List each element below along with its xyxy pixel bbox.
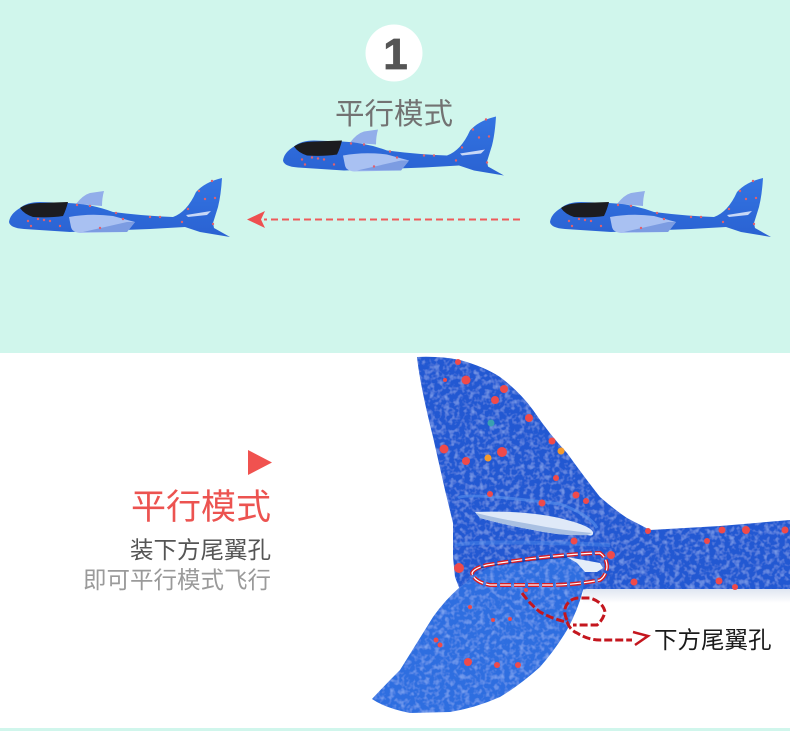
fin slot highlight [458, 496, 597, 528]
red foam speckles [434, 359, 788, 668]
callout: dashed highlight around lower tail hole [472, 553, 607, 585]
bottom mint strip [0, 728, 790, 731]
panel: white photo background [0, 353, 790, 728]
lower tail slot [567, 557, 603, 572]
callout label: 下方尾翼孔 [654, 627, 772, 653]
lower tail plane [372, 557, 585, 713]
callout: dashed leader arrow [522, 593, 648, 645]
step number badge [366, 24, 422, 82]
photo: plane tail close-up [372, 357, 790, 713]
heading: parallel mode: 平行模式 [335, 98, 453, 131]
panel: mint background [0, 0, 790, 353]
slot shadow line [478, 557, 567, 568]
text block: instructions [83, 537, 271, 593]
text block: instructions: 装下方尾翼孔 [130, 537, 271, 563]
plane: left [9, 178, 230, 237]
step number badge: 1 [383, 30, 408, 79]
soft shadow under fuselage [583, 589, 790, 603]
plane: top centre [283, 116, 504, 176]
text block: instructions: 即可平行模式飞行 [83, 567, 271, 593]
plane: right [550, 178, 771, 237]
heading: parallel mode red: 平行模式 [131, 488, 271, 527]
orange and teal speckles [484, 420, 564, 462]
arrow: flight direction [247, 211, 520, 228]
icon: red triangle marker [248, 450, 272, 475]
tail body and fin [417, 357, 790, 592]
fuselage foam highlight [455, 542, 610, 545]
upper tail slot [475, 512, 593, 536]
